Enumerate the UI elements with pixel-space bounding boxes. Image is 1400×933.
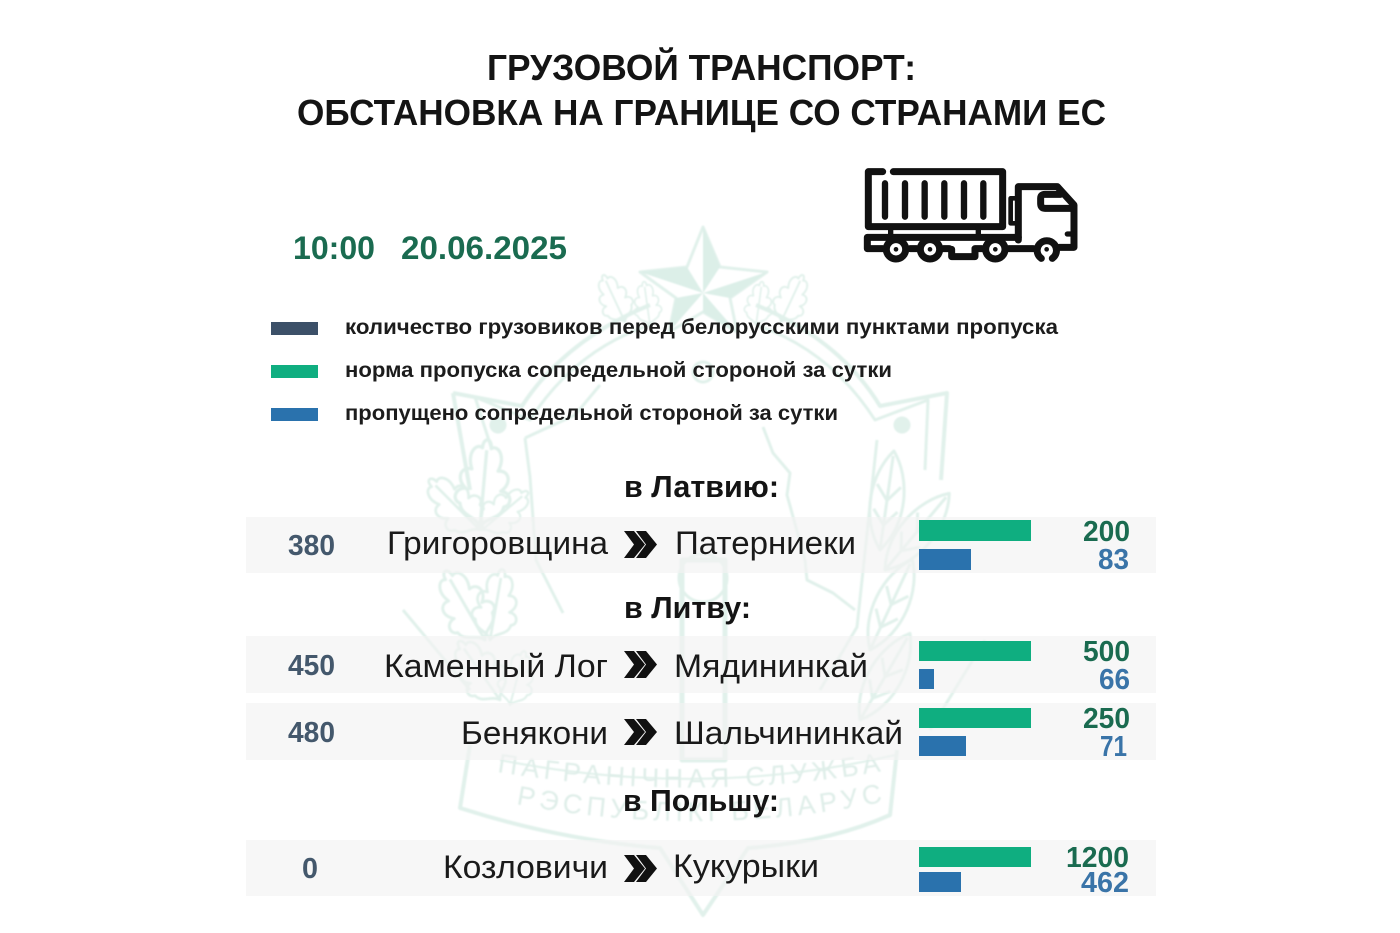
heading: Poland: в Польшу: xyxy=(623,783,779,818)
row: Grigorovshchina to Paternieki: Патерниеки xyxy=(675,525,856,561)
date and time: 10:00 xyxy=(293,230,375,266)
date and time xyxy=(293,230,567,266)
row: Kozlovichi to Kukuryki: 1200 xyxy=(1066,842,1129,874)
date and time: 20.06.2025 xyxy=(401,230,567,266)
title: ОБСТАНОВКА НА ГРАНИЦЕ СО СТРАНАМИ ЕС xyxy=(297,92,1106,133)
row: Grigorovshchina to Paternieki: 200 xyxy=(1083,516,1130,548)
row: Grigorovshchina to Paternieki xyxy=(246,516,1156,576)
title: ГРУЗОВОЙ ТРАНСПОРТ: xyxy=(487,46,916,88)
row: Kamenny Log to Medininkai: 450 xyxy=(288,650,335,682)
row: Benyakoni to Salcininkai: Бенякони xyxy=(461,715,608,751)
legend item: passed per day: пропущено сопредельной стороной за сутки xyxy=(345,402,838,425)
row: Kamenny Log to Medininkai: 66 xyxy=(1099,664,1130,696)
heading: Lithuania: в Литву: xyxy=(624,590,751,625)
watermark text: ПАГРАНІЧНАЯ СЛУЖБА xyxy=(499,755,881,788)
row: Kamenny Log to Medininkai: Каменный Лог xyxy=(384,648,608,684)
row: Grigorovshchina to Paternieki: 380 xyxy=(288,530,335,562)
heading: Latvia: в Латвию: xyxy=(624,469,779,504)
icon: truck xyxy=(867,172,1074,259)
row: Grigorovshchina to Paternieki: Григоровщина xyxy=(387,525,608,561)
row: Grigorovshchina to Paternieki: 83 xyxy=(1098,544,1129,576)
row: Kozlovichi to Kukuryki: 462 xyxy=(1081,867,1129,899)
watermark text xyxy=(499,755,881,822)
row: Kamenny Log to Medininkai: Мядининкай xyxy=(674,648,868,684)
row: Benyakoni to Salcininkai: 71 xyxy=(1100,731,1127,763)
title xyxy=(297,46,1106,133)
row: Kozlovichi to Kukuryki: Кукурыки xyxy=(673,848,819,884)
row: Benyakoni to Salcininkai: Шальчининкай xyxy=(674,715,903,751)
row: Benyakoni to Salcininkai xyxy=(246,703,1156,763)
row: Benyakoni to Salcininkai: 480 xyxy=(288,717,335,749)
legend item: trucks waiting: количество грузовиков перед белорусскими пунктами пропуска xyxy=(345,316,1058,339)
row: Kamenny Log to Medininkai xyxy=(246,636,1156,696)
row: Kozlovichi to Kukuryki: Козловичи xyxy=(443,849,608,885)
row: Kozlovichi to Kukuryki xyxy=(246,840,1156,899)
row: Kamenny Log to Medininkai: 500 xyxy=(1083,636,1130,668)
row: Kozlovichi to Kukuryki: 0 xyxy=(302,853,318,885)
legend xyxy=(271,316,1058,425)
watermark: border service emblem xyxy=(403,227,985,915)
row: Benyakoni to Salcininkai: 250 xyxy=(1083,703,1130,735)
legend item: daily norm: норма пропуска сопредельной стороной за сутки xyxy=(345,359,892,382)
